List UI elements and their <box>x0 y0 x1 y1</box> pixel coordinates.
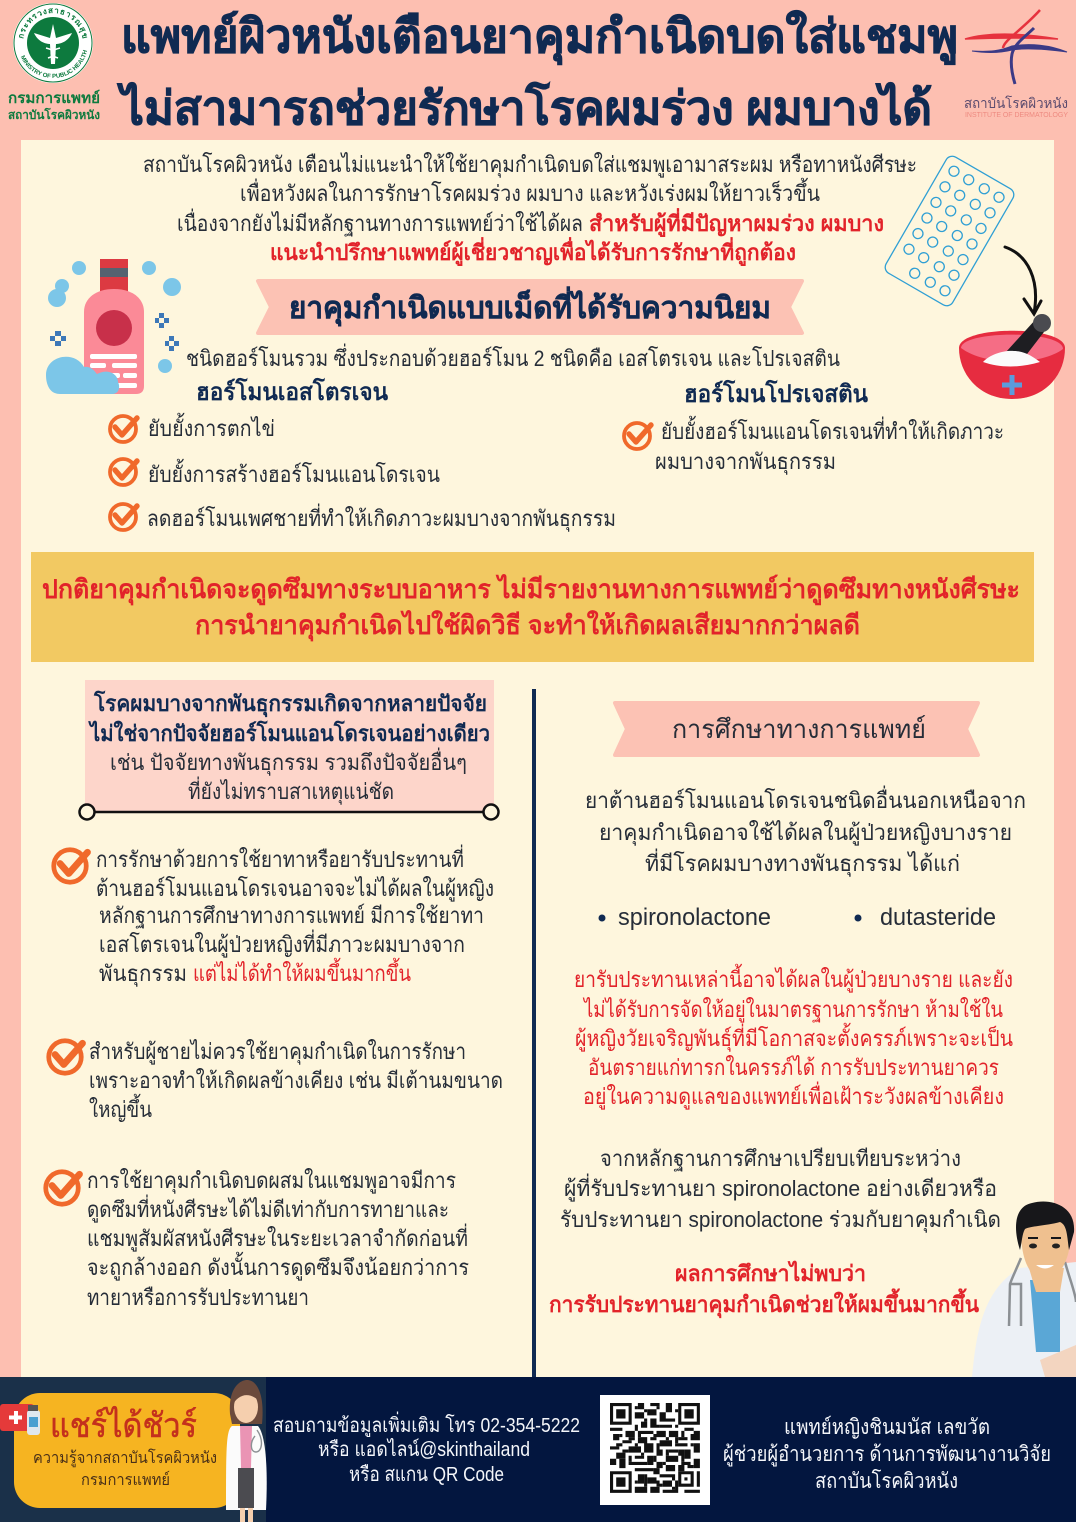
icon: mortar and pestle <box>959 314 1065 399</box>
point: men should not use: สำหรับผู้ชายไม่ควรใช้ยาคุมกำเนิดในการรักษา <box>89 1039 466 1065</box>
text: comparative study: ผู้ที่รับประทานยา spironolactone อย่างเดียวหรือ <box>564 1173 997 1202</box>
credits text: แพทย์หญิงชินมนัส เลขวัต <box>784 1415 990 1439</box>
text: combined hormone type: ชนิดฮอร์โมนรวม ซึ่งประกอบด้วยฮอร์โมน 2 ชนิดคือ เอสโตรเจน และโปรเจสติน <box>186 343 840 371</box>
column: progestin: ผมบางจากพันธุกรรม <box>655 449 836 475</box>
text: other anti-androgens: ยาคุมกำเนิดอาจใช้ได้ผลในผู้ป่วยหญิงบางราย <box>599 820 1012 846</box>
contact text: หรือ สแกน QR Code <box>349 1464 504 1486</box>
left box: causes of hereditary hair thinning: ที่ยังไม่ทราบสาเหตุแน่ชัด <box>188 776 394 805</box>
conclusion: study result: การรับประทานยาคุมกำเนิดช่วยให้ผมขึ้นมากขึ้น <box>549 1288 979 1319</box>
text: comparative study <box>560 1146 1001 1233</box>
logo: Ministry of Public Health: กระทรวงสาธารณสุข <box>19 8 88 38</box>
logo: Institute of Dermatology: INSTITUTE OF DERMATOLOGY <box>965 112 1068 119</box>
illustration: male doctor <box>972 1202 1076 1377</box>
list: drug names: spironolactone <box>618 904 771 931</box>
warning text: oral drugs: ยารับประทานเหล่านี้อาจได้ผลในผู้ป่วยบางราย และยัง <box>574 964 1013 993</box>
footer left block: Share Dai Chua <box>0 1377 267 1522</box>
QR code <box>600 1395 710 1505</box>
icon: birth control pill pack <box>883 154 1016 308</box>
illustration: female doctor <box>226 1380 267 1522</box>
point: shampoo absorption: ดูดซึมที่หนังศีรษะได้ไม่ดีเท่ากับการทายาและ <box>87 1194 449 1223</box>
column: estrogen <box>110 377 616 532</box>
panel: main cream content <box>21 140 1054 1377</box>
icon: shampoo bottle <box>46 259 181 394</box>
title <box>116 9 958 134</box>
warning text: oral drugs: อันตรายแก่ทารกในครรภ์ได้ การรับประทานยาควร <box>588 1055 999 1080</box>
text: other anti-androgens: ยาต้านฮอร์โมนแอนโดรเจนชนิดอื่นนอกเหนือจาก <box>585 785 1026 813</box>
credits text <box>723 1415 1051 1493</box>
text: other anti-androgens: ที่มีโรคผมบางทางพันธุกรรม ได้แก่ <box>645 848 960 877</box>
list: drug names: dutasteride <box>880 904 996 931</box>
logo: Ministry of Public Health: กรมการแพทย์ <box>8 89 100 107</box>
logo: Institute of Dermatology: สถาบันโรคผิวหนัง <box>964 95 1068 111</box>
intro text <box>143 152 917 267</box>
logo: Institute of Dermatology <box>964 10 1068 119</box>
contact text: สอบถามข้อมูลเพิ่มเติม โทร 02-354-5222 <box>273 1411 580 1438</box>
heading banner: popular pills: ยาคุมกำเนิดแบบเม็ดที่ได้รับความนิยม <box>289 286 771 327</box>
point: men should not use: เพราะอาจทำให้เกิดผลข้างเคียง เช่น มีเต้านมขนาด <box>89 1068 503 1093</box>
list: drug names <box>598 904 996 931</box>
heading banner: popular pills <box>258 281 802 333</box>
vertical divider <box>532 689 536 1377</box>
contact text: หรือ แอดไลน์@skinthailand <box>318 1438 530 1461</box>
logo: Ministry of Public Health: สถาบันโรคผิวหนัง <box>8 107 100 122</box>
point: topical and oral anti-androgen treatment: แต่ไม่ได้ทำให้ผมขึ้นมากขึ้น <box>193 958 411 986</box>
point: men should not use: ใหญ่ขึ้น <box>89 1094 152 1122</box>
point: topical and oral anti-androgen treatment: ต้านฮอร์โมนแอนโดรเจนอาจจะไม่ได้ผลในผู้หญิง <box>96 876 494 902</box>
left box: causes of hereditary hair thinning: ไม่ใช่จากปัจจัยฮอร์โมนแอนโดรเจนอย่างเดียว <box>88 720 490 746</box>
conclusion: study result: ผลการศึกษาไม่พบว่า <box>675 1260 866 1286</box>
title: ไม่สามารถช่วยรักษาโรคผมร่วง ผมบางได้ <box>116 81 932 134</box>
arrow: pills into mortar <box>1005 247 1041 314</box>
intro text: เนื่องจากยังไม่มีหลักฐานทางการแพทย์ว่าใช้ได้ผล <box>177 208 583 237</box>
text: other anti-androgens <box>585 785 1026 877</box>
footer background <box>0 1377 1076 1522</box>
left box: causes of hereditary hair thinning: โรคผมบางจากพันธุกรรมเกิดจากหลายปัจจัย <box>93 690 487 718</box>
footer left block: Share Dai Chua: ความรู้จากสถาบันโรคผิวหนัง <box>33 1448 217 1468</box>
text: comparative study: รับประทานยา spironolactone ร่วมกับยาคุมกำเนิด <box>560 1207 1001 1233</box>
conclusion: study result <box>549 1260 979 1319</box>
column: progestin: ฮอร์โมนโปรเจสติน <box>684 379 869 408</box>
point: men should not use <box>49 1039 503 1122</box>
point: shampoo absorption: จะถูกล้างออก ดังนั้นการดูดซึมจึงน้อยกว่าการ <box>87 1252 469 1281</box>
footer left block: Share Dai Chua: กรมการแพทย์ <box>81 1470 170 1489</box>
text: comparative study: จากหลักฐานการศึกษาเปรียบเทียบระหว่าง <box>600 1146 961 1172</box>
callout: yellow warning banner: การนำยาคุมกำเนิดไปใช้ผิดวิธี จะทำให้เกิดผลเสียมากกว่าผลดี <box>195 609 860 642</box>
icon: first aid kit and bottle <box>0 1404 40 1435</box>
title: แพทย์ผิวหนังเตือนยาคุมกำเนิดบดใส่แชมพู <box>121 9 958 65</box>
intro text: แนะนำปรึกษาแพทย์ผู้เชี่ยวชาญเพื่อได้รับการรักษาที่ถูกต้อง <box>270 236 796 267</box>
column: progestin <box>624 379 1004 475</box>
column: progestin: ยับยั้งฮอร์โมนแอนโดรเจนที่ทำให้เกิดภาวะ <box>661 416 1004 444</box>
contact text <box>273 1411 580 1486</box>
credits text: สถาบันโรคผิวหนัง <box>815 1469 958 1493</box>
point: topical and oral anti-androgen treatment: หลักฐานการศึกษาทางการแพทย์ มีการใช้ยาทา <box>99 903 484 929</box>
point: shampoo absorption: ทายาหรือการรับประทานยา <box>87 1285 309 1310</box>
intro text: เพื่อหวังผลในการรักษาโรคผมร่วง ผมบาง และหวังเร่งผมให้ยาวเร็วขึ้น <box>240 178 820 206</box>
intro text: สำหรับผู้ที่มีปัญหาผมร่วง ผมบาง <box>589 207 884 238</box>
column: estrogen: ยับยั้งการตกไข่ <box>148 413 275 441</box>
warning text: oral drugs: อยู่ในความดูแลของแพทย์เพื่อเฝ้าระวังผลข้างเคียง <box>583 1081 1004 1110</box>
warning text: oral drugs: ผู้หญิงวัยเจริญพันธุ์ที่มีโอกาสจะตั้งครรภ์เพราะจะเป็น <box>575 1023 1013 1052</box>
callout: yellow warning banner: ปกติยาคุมกำเนิดจะดูดซึมทางระบบอาหาร ไม่มีรายงานทางการแพทย์ว่าดูดซึมทางหนังศีรษะ <box>42 573 1020 606</box>
column: estrogen: ฮอร์โมนเอสโตรเจน <box>196 377 389 406</box>
warning text: oral drugs <box>574 964 1013 1110</box>
warning text: oral drugs: ไม่ได้รับการจัดให้อยู่ในมาตรฐานการรักษา ห้ามใช้ใน <box>582 997 1003 1023</box>
logo: Ministry of Public Health: MINISTRY OF PUBLIC HEALTH <box>20 50 88 78</box>
point: topical and oral anti-androgen treatment: การรักษาด้วยการใช้ยาทาหรือยารับประทานที่ <box>96 844 464 872</box>
logo: Ministry of Public Health <box>8 3 100 122</box>
intro text: สถาบันโรคผิวหนัง เตือนไม่แนะนำให้ใช้ยาคุมกำเนิดบดใส่แชมพูเอามาสระผม หรือทาหนังศีรษะ <box>143 152 917 178</box>
left box: causes of hereditary hair thinning <box>80 680 498 820</box>
column: estrogen: ลดฮอร์โมนเพศชายที่ทำให้เกิดภาวะผมบางจากพันธุกรรม <box>147 503 616 532</box>
callout: yellow warning banner <box>31 552 1034 662</box>
point: topical and oral anti-androgen treatment: พันธุกรรม <box>99 961 187 987</box>
left box: causes of hereditary hair thinning: เช่น ปัจจัยทางพันธุกรรม รวมถึงปัจจัยอื่นๆ <box>110 747 467 776</box>
footer left block: Share Dai Chua: แชร์ได้ชัวร์ <box>50 1406 197 1445</box>
column: estrogen: ยับยั้งการสร้างฮอร์โมนแอนโดรเจน <box>148 459 440 487</box>
heading banner: medical studies: การศึกษาทางการแพทย์ <box>672 714 926 744</box>
point: shampoo absorption: การใช้ยาคุมกำเนิดบดผสมในแชมพูอาจมีการ <box>87 1168 456 1194</box>
point: shampoo absorption: แชมพูสัมผัสหนังศีรษะในระยะเวลาจำกัดก่อนที่ <box>87 1223 468 1252</box>
point: topical and oral anti-androgen treatment <box>54 844 494 987</box>
point: shampoo absorption <box>46 1168 469 1310</box>
heading banner: medical studies <box>615 703 978 755</box>
point: topical and oral anti-androgen treatment: เอสโตรเจนในผู้ป่วยหญิงที่มีภาวะผมบางจาก <box>99 929 465 958</box>
